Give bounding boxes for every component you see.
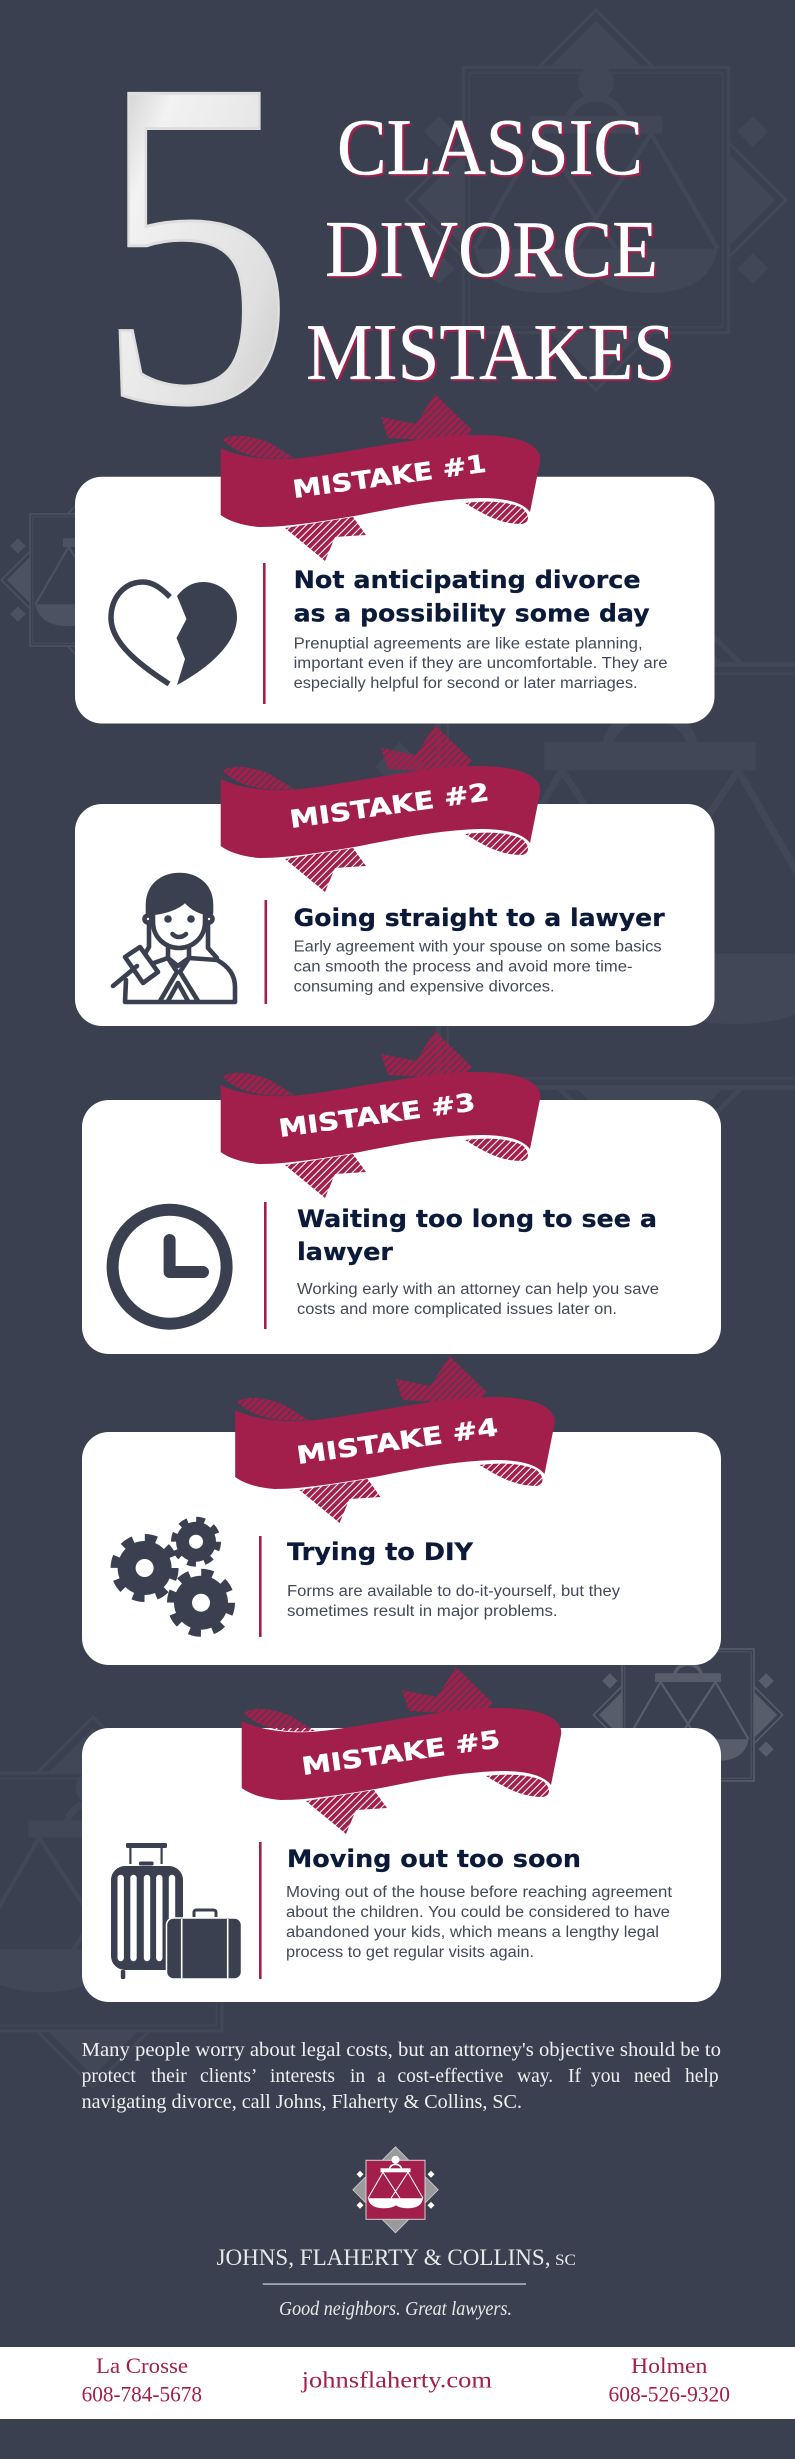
text: mistake 2: Early agreement with your spouse on some basics: [294, 939, 662, 956]
text: mistake 5: abandoned your kids, which means a lengthy legal: [286, 1924, 659, 1941]
title: [306, 104, 675, 397]
icon: luggage: [111, 1843, 242, 1979]
text: mistake 5: Moving out of the house before reaching agreement: [286, 1884, 673, 1901]
panel: mistake 1: [75, 477, 714, 724]
title: MISTAKES: [306, 309, 675, 397]
firm name: JOHNS, FLAHERTY & COLLINS,: [216, 2245, 550, 2270]
closing paragraph: need: [634, 2066, 676, 2087]
panel: mistake 3: [82, 1100, 721, 1354]
firm name: SC: [555, 2252, 576, 2269]
watermark: scales logo bottom left: [0, 1717, 278, 2087]
heading: mistake 2: Going straight to a lawyer: [294, 904, 665, 932]
contact: La Crosse: La Crosse: [96, 2353, 188, 2378]
contact: Holmen: [608, 2353, 730, 2407]
text: mistake 5: about the children. You could be considered to have: [286, 1904, 670, 1921]
heading: mistake 3: lawyer: [297, 1238, 393, 1266]
closing paragraph: way.: [517, 2066, 558, 2087]
text: mistake 2: [294, 939, 662, 996]
heading: mistake 3: [297, 1205, 657, 1266]
contact: La Crosse: 608-784-5678: [82, 2382, 202, 2407]
text: mistake 1: Prenuptial agreements are like estate planning,: [294, 635, 643, 652]
closing paragraph: cost-effective: [398, 2066, 508, 2087]
text: mistake 4: [287, 1583, 620, 1620]
closing paragraph: interests: [270, 2066, 340, 2087]
heading: mistake 1: [294, 566, 650, 628]
panel: mistake 4: [82, 1432, 721, 1665]
heading: mistake 3: Waiting too long to see a: [297, 1205, 657, 1233]
icon: gears: [115, 1520, 231, 1633]
text: mistake 5: [286, 1884, 673, 1961]
contact: Holmen: 608-526-9320: [608, 2382, 730, 2407]
icon: clock: [113, 1210, 227, 1324]
ribbon: mistake 5: MISTAKE #5: [300, 1724, 502, 1781]
icon: broken heart: [111, 582, 237, 685]
closing paragraph: their: [151, 2066, 192, 2087]
ribbon: mistake 2: MISTAKE #2: [288, 777, 491, 834]
closing paragraph: [82, 2040, 721, 2113]
ribbon: mistake 1: [221, 394, 540, 561]
icon: lawyer with gavel: [113, 875, 235, 1002]
heading: mistake 1: Not anticipating divorce: [294, 566, 641, 594]
contact: La Crosse: [82, 2353, 202, 2407]
text: mistake 2: can smooth the process and avoid more time-: [294, 959, 633, 976]
contact: website: johnsflaherty.com: [301, 2368, 492, 2394]
closing paragraph: If: [568, 2066, 586, 2087]
title: CLASSIC: [337, 104, 643, 192]
text: mistake 4: sometimes result in major problems.: [287, 1603, 558, 1620]
tagline: Good neighbors. Great lawyers.: [279, 2298, 512, 2320]
text: mistake 4: Forms are available to do-it-yourself, but they: [287, 1583, 620, 1600]
logo: firm emblem: [353, 2147, 438, 2233]
ribbon: mistake 3: [221, 1031, 540, 1198]
ribbon: mistake 4: MISTAKE #4: [295, 1412, 500, 1470]
closing paragraph: you: [591, 2066, 625, 2087]
closing paragraph: in: [350, 2066, 370, 2087]
ribbon: mistake 1: MISTAKE #1: [291, 449, 488, 504]
watermark: scales logo top right: [406, 10, 786, 390]
watermark: scales logo left: [1, 485, 191, 675]
closing paragraph: protect: [82, 2066, 141, 2087]
closing paragraph: a: [377, 2066, 391, 2087]
panel: mistake 5: [82, 1728, 721, 2002]
panel: mistake 2: [75, 804, 714, 1026]
text: mistake 1: important even if they are uncomfortable. They are: [294, 655, 668, 672]
contact bar: [0, 2347, 795, 2419]
ribbon: mistake 5: [242, 1667, 561, 1834]
closing paragraph: navigating divorce, call Johns, Flaherty & Collins, SC.: [82, 2092, 522, 2113]
ribbon: mistake 3: MISTAKE #3: [277, 1087, 477, 1143]
text: mistake 2: consuming and expensive divorces.: [294, 979, 555, 996]
heading: mistake 1: as a possibility some day: [294, 600, 650, 628]
watermark: scales logo right: [593, 1620, 783, 1810]
text: mistake 5: process to get regular visits again.: [286, 1944, 534, 1961]
title: DIVORCE: [325, 206, 658, 294]
text: mistake 3: Working early with an attorney can help you save: [297, 1281, 659, 1298]
text: mistake 3: costs and more complicated issues later on.: [297, 1301, 617, 1318]
watermark: large scales logo centre right: [347, 573, 795, 1179]
ribbon: mistake 2: [221, 725, 540, 892]
text: mistake 1: [294, 635, 668, 692]
heading: mistake 4: Trying to DIY: [287, 1538, 474, 1566]
closing paragraph: Many people worry about legal costs, but an attorney's objective should be to: [82, 2040, 721, 2061]
contact: Holmen: Holmen: [631, 2353, 707, 2378]
text: mistake 3: [297, 1281, 659, 1318]
heading: mistake 5: Moving out too soon: [287, 1845, 581, 1873]
closing paragraph: clients’: [200, 2066, 261, 2087]
text: mistake 1: especially helpful for second or later marriages.: [294, 675, 638, 692]
closing paragraph: help: [685, 2066, 719, 2087]
ribbon: mistake 4: [235, 1356, 555, 1523]
